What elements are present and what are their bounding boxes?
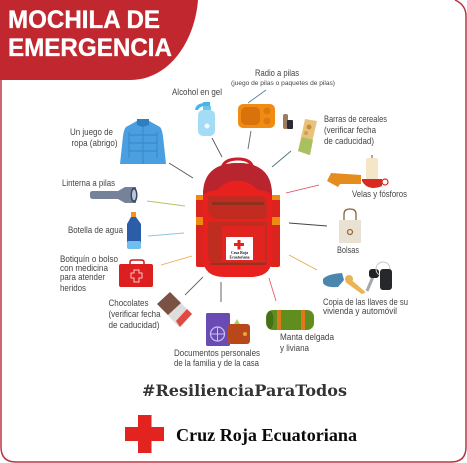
icon: bottle [127, 212, 141, 249]
item: cereal bars: de caducidad) [324, 136, 374, 146]
item: flashlight [62, 178, 138, 203]
icon: candle [362, 155, 388, 188]
item: blanket: y liviana [280, 343, 309, 353]
item: candles and matches: Velas y fósforos [352, 189, 407, 199]
item: chocolates [108, 292, 192, 330]
icon: backpack [196, 159, 280, 277]
item: blanket: Manta delgada [280, 332, 334, 342]
icon: house key [323, 273, 364, 293]
backpack label [226, 237, 253, 260]
title: EMERGENCIA [8, 34, 172, 62]
item: keys: Copia de las llaves de su [323, 297, 408, 307]
item: jacket: ropa (abrigo) [72, 138, 118, 148]
hashtag: #ResilienciaParaTodos [142, 381, 347, 400]
item: bags [337, 209, 361, 255]
icon: tote bag [339, 209, 361, 243]
item: cereal bars: (verificar fecha [324, 125, 376, 135]
logo: Cruz Roja Ecuatoriana [125, 415, 357, 453]
item: first aid kit: heridos [60, 283, 86, 293]
item: first aid kit: para atender [60, 272, 105, 282]
item: first aid kit: Botiquín o bolso [60, 254, 118, 264]
title [8, 6, 172, 62]
item: jacket [70, 119, 166, 164]
icon: cereal bar [298, 119, 317, 155]
icon: wallet [228, 319, 250, 344]
icon: car key [367, 262, 392, 291]
item: bags: Bolsas [337, 245, 359, 255]
icon: radio [238, 104, 275, 128]
item: water bottle [68, 212, 141, 249]
item: alcohol gel: Alcohol en gel [172, 87, 222, 97]
icon: first aid case [119, 260, 153, 287]
item: chocolates: Chocolates [108, 298, 149, 308]
icon: gel bottle [195, 102, 215, 136]
item: chocolates: de caducidad) [108, 320, 160, 330]
item: alcohol gel [172, 87, 222, 136]
item: radio [231, 68, 335, 129]
item: radio: Radio a pilas [255, 68, 299, 78]
item: water bottle: Botella de agua [68, 225, 123, 235]
header banner [0, 0, 198, 80]
item: blanket [266, 310, 334, 353]
item: first aid kit [60, 254, 153, 293]
icon: jacket [120, 119, 166, 164]
item: first aid kit: con medicina [60, 263, 108, 273]
title: MOCHILA DE [8, 6, 160, 34]
icon: matchbox [327, 173, 361, 187]
item: radio: (juego de pilas o paquetes de pilas) [231, 81, 335, 87]
item: jacket: Un juego de [70, 127, 113, 137]
item: candles and matches [327, 155, 407, 199]
item: chocolates: (verificar fecha [108, 309, 160, 319]
backpack label: Ecuatoriana [229, 256, 250, 260]
connector lines [147, 90, 327, 302]
backpack label: Cruz Roja [231, 251, 248, 255]
item: documents: Documentos personales [174, 348, 260, 358]
item: keys: vivienda y automóvil [323, 306, 397, 316]
icon: passport [206, 313, 230, 346]
item: flashlight: Linterna a pilas [62, 178, 115, 188]
item: cereal bars [298, 114, 387, 155]
icon: chocolate bar [157, 292, 192, 327]
item: keys [323, 262, 408, 316]
icon: flashlight [90, 187, 138, 203]
icon: red cross [125, 415, 164, 453]
organization name: Cruz Roja Ecuatoriana [176, 425, 357, 445]
icon: rolled blanket [266, 310, 314, 330]
item: cereal bars: Barras de cereales [324, 114, 387, 124]
item: documents: de la familia y de la casa [174, 358, 259, 368]
item: documents [174, 313, 260, 368]
icon: batteries [283, 114, 293, 129]
